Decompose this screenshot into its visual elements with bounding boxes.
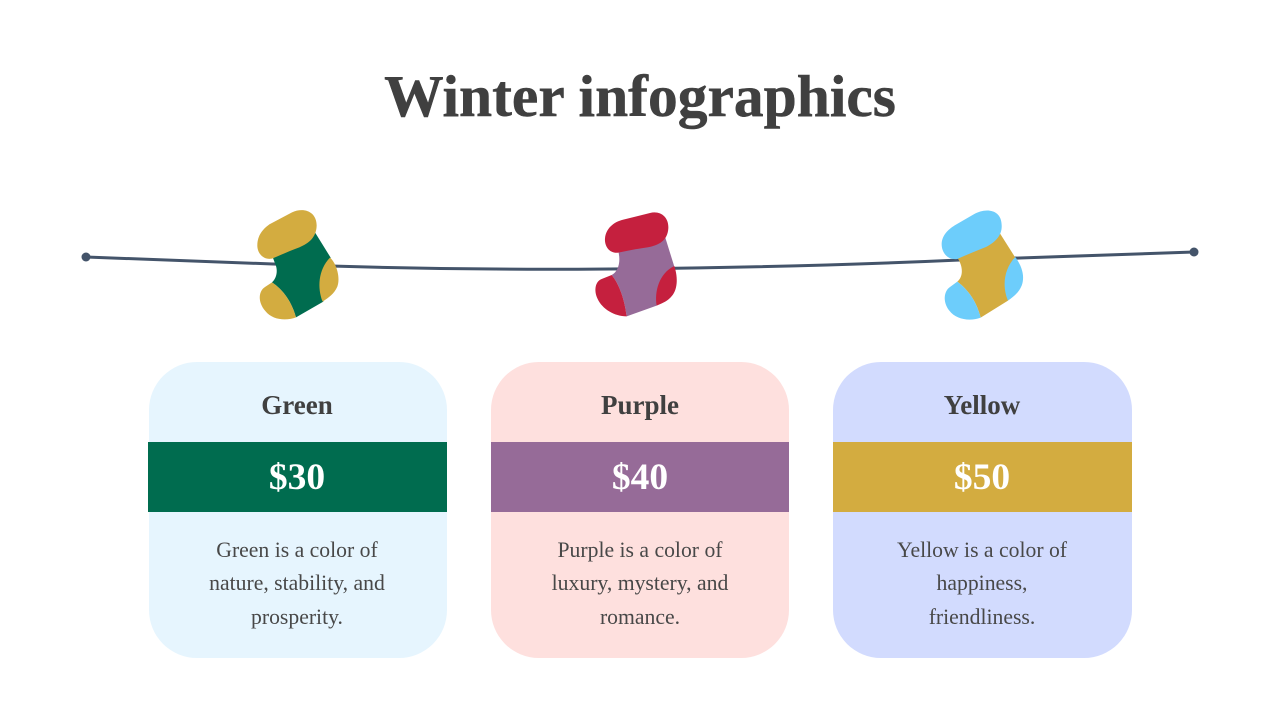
heading: yellow: Yellow bbox=[944, 390, 1020, 420]
card background: yellow bbox=[833, 362, 1132, 658]
title: Winter infographics bbox=[384, 63, 896, 129]
clothesline with socks bbox=[82, 210, 1198, 320]
description: yellow: Yellow is a color of bbox=[897, 538, 1067, 562]
heading: purple: Purple bbox=[601, 390, 679, 420]
description: yellow: happiness, bbox=[937, 571, 1027, 595]
price band: purple bbox=[491, 442, 789, 512]
card background: green bbox=[149, 362, 447, 658]
description: yellow: friendliness. bbox=[929, 604, 1035, 628]
card background: purple bbox=[491, 362, 789, 658]
description: green: prosperity. bbox=[251, 604, 343, 628]
price: yellow: $50 bbox=[954, 457, 1010, 498]
icon: purple sock bbox=[595, 212, 677, 316]
description: purple bbox=[552, 538, 728, 628]
description: green bbox=[209, 538, 385, 628]
heading: green: Green bbox=[261, 390, 333, 420]
price: purple: $40 bbox=[612, 457, 668, 498]
description: yellow bbox=[897, 538, 1067, 628]
icon: green sock bbox=[257, 210, 339, 319]
description: purple: romance. bbox=[600, 604, 680, 628]
price band: yellow bbox=[833, 442, 1132, 512]
clothesline bbox=[82, 248, 1198, 269]
price: green: $30 bbox=[269, 457, 325, 498]
description: purple: Purple is a color of bbox=[557, 538, 723, 562]
description: green: nature, stability, and bbox=[209, 571, 385, 595]
description: green: Green is a color of bbox=[216, 538, 378, 562]
icon: yellow sock bbox=[942, 210, 1023, 320]
description: purple: luxury, mystery, and bbox=[552, 571, 728, 595]
price band: green bbox=[148, 442, 447, 512]
